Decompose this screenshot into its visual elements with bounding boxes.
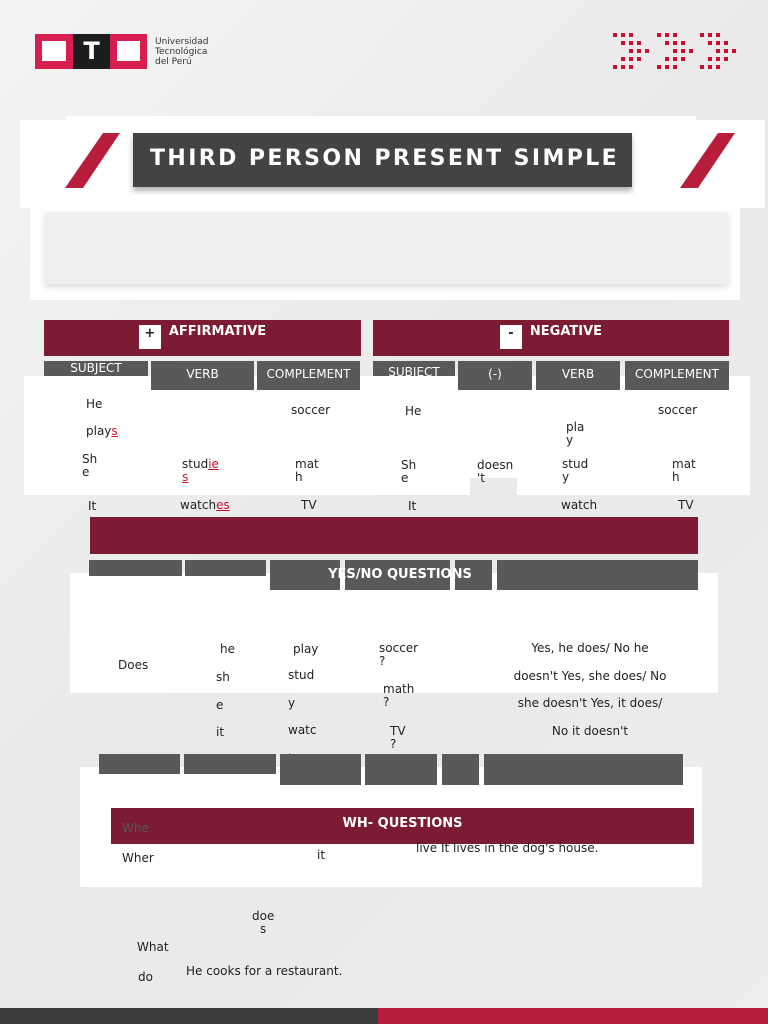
panel: affirmative/negative: s (182, 470, 188, 484)
heading: affirmative (44, 320, 361, 356)
panel: wh- questions: What (137, 940, 169, 954)
logo: Universidad (155, 37, 208, 47)
panel: affirmative/negative: h (295, 470, 303, 484)
panel: affirmative/negative: TV (301, 498, 317, 512)
heading: affirmative: AFFIRMATIVE (169, 324, 266, 339)
panel: yes/no questions (70, 517, 718, 766)
panel: affirmative/negative: doesn (477, 458, 513, 472)
panel: affirmative/negative: TV (678, 498, 694, 512)
logo: del Perú (155, 57, 192, 67)
footer bar (0, 1008, 768, 1024)
panel: affirmative/negative: watch (561, 498, 597, 512)
panel: yes/no questions: ? (383, 695, 389, 709)
panel: affirmative/negative: VERB (186, 367, 219, 381)
affirmative rows: He (86, 397, 102, 411)
logo (35, 34, 208, 69)
panel: yes/no questions: it (216, 725, 224, 739)
panel: yes/no questions: sh (216, 670, 230, 684)
panel: affirmative/negative: h (672, 470, 680, 484)
panel: affirmative/negative: Sh (82, 452, 97, 466)
heading: wh- questions: WH- QUESTIONS (342, 816, 462, 831)
heading: wh- questions (111, 808, 694, 844)
panel: affirmative/negative: plays (86, 424, 118, 438)
negative rows: He (405, 404, 421, 418)
panel: wh- questions: live It lives in the dog's house. (416, 841, 598, 855)
panel: wh- questions: it (317, 848, 325, 862)
panel: affirmative/negative: It (88, 499, 96, 513)
panel: yes/no questions: watc (288, 723, 316, 737)
logo: T (83, 37, 100, 65)
panel: affirmative/negative: Sh (401, 458, 416, 472)
panel: affirmative/negative: mat (672, 457, 696, 471)
panel: wh- questions: He cooks for a restaurant. (186, 964, 342, 978)
icon: red dot chevrons (613, 33, 736, 69)
panel: wh- questions: doe (252, 909, 274, 923)
panel: affirmative/negative: 't (477, 471, 485, 485)
panel: yes/no questions: math (383, 682, 414, 696)
heading: affirmative: + (144, 326, 155, 341)
panel: wh- questions: Wher (122, 851, 154, 865)
panel: affirmative/negative: y (566, 433, 573, 447)
panel: yes/no questions: No it doesn't (552, 724, 628, 738)
panel: yes/no questions: TV (390, 724, 406, 738)
panel: yes/no questions: y (288, 696, 295, 710)
panel: yes/no questions: doesn't Yes, she does/ No (514, 668, 666, 682)
panel: affirmative/negative: VERB (562, 367, 594, 381)
logo: Tecnológica (155, 47, 207, 57)
title panel (20, 116, 765, 300)
title (133, 133, 632, 187)
panel: yes/no questions: soccer (379, 641, 418, 655)
panel: yes/no questions: ? (379, 654, 385, 668)
panel: wh- questions: Whe (122, 821, 149, 835)
icon: red slash right (680, 133, 735, 188)
panel: affirmative/negative: COMPLEMENT (635, 367, 719, 381)
panel: wh- questions: s (260, 922, 266, 936)
panel: yes/no questions: ? (390, 737, 396, 751)
panel: affirmative/negative: (-) (488, 367, 502, 381)
panel: affirmative/negative: watches (180, 498, 230, 512)
panel: wh- questions: do (138, 970, 153, 984)
panel: yes/no questions: e (216, 698, 223, 712)
panel: affirmative/negative: COMPLEMENT (267, 367, 350, 381)
panel: wh- questions (80, 754, 702, 984)
panel: yes/no questions: she doesn't Yes, it does/ (518, 696, 662, 710)
panel: affirmative/negative: soccer (291, 403, 330, 417)
icon: red slash left (65, 133, 120, 188)
panel: affirmative/negative: e (401, 471, 408, 485)
panel: yes/no questions: play (293, 642, 318, 656)
panel: affirmative/negative: pla (566, 420, 584, 434)
heading: yes/no questions: YES/NO QUESTIONS (328, 567, 472, 582)
panel: affirmative/negative: soccer (658, 403, 697, 417)
heading: negative (373, 320, 729, 356)
panel: affirmative/negative: y (562, 470, 569, 484)
panel: yes/no questions: he (220, 642, 235, 656)
heading: negative: - (508, 326, 514, 341)
panel: affirmative/negative: SUBJECT (70, 361, 122, 375)
panel: affirmative/negative: e (82, 465, 89, 479)
panel: affirmative/negative: studie (182, 457, 219, 471)
panel: yes/no questions: Does (118, 658, 148, 672)
panel: affirmative/negative: stud (562, 457, 588, 471)
panel: yes/no questions: stud (288, 668, 314, 682)
title: THIRD PERSON PRESENT SIMPLE (150, 146, 619, 171)
heading: negative: NEGATIVE (530, 324, 602, 339)
panel: yes/no questions: h (288, 752, 296, 766)
panel: affirmative/negative: mat (295, 457, 319, 471)
panel: yes/no questions: Yes, he does/ No he (531, 641, 649, 655)
panel: affirmative/negative (24, 320, 750, 513)
panel: affirmative/negative: It (408, 499, 416, 513)
